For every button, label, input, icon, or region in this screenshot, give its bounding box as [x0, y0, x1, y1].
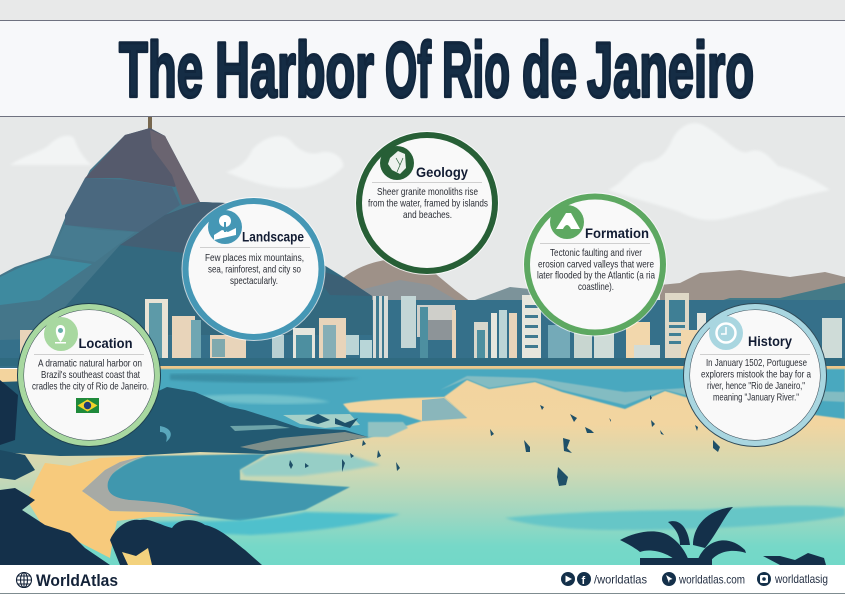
text: Location body: A dramatic natural harbor on	[38, 358, 142, 370]
text: Formation body: coastline).	[578, 282, 614, 293]
skyline buildings	[20, 293, 842, 362]
shoreline	[0, 358, 845, 370]
heading: Geology: Geology	[416, 164, 468, 180]
footer	[0, 565, 845, 594]
bay water and sand	[0, 369, 845, 566]
logo wordmark: WorldAtlas	[36, 571, 118, 590]
text: Geology body	[368, 187, 488, 221]
text: History body: meaning "January River."	[713, 392, 799, 404]
instagram handle: worldatlasig	[774, 572, 828, 586]
title: Harbor	[215, 26, 374, 114]
icon: youtube	[561, 572, 575, 586]
icon: granite rock	[380, 146, 414, 180]
panel: Geology	[355, 131, 499, 275]
text: History body: In January 1502, Portuguese	[706, 358, 807, 369]
text: Landscape body: spectacularly.	[230, 276, 278, 287]
top band	[0, 0, 845, 21]
facebook handle: /worldatlas	[594, 572, 647, 586]
title: Rio	[442, 26, 510, 114]
text: Landscape body	[205, 253, 304, 287]
text: Formation body: Tectonic faulting and river	[550, 248, 642, 259]
foreground palm right	[620, 507, 826, 565]
panel: Formation	[523, 192, 667, 336]
sky	[0, 117, 845, 367]
text: Geology body: from the water, framed by islands	[368, 198, 488, 210]
text: History body	[701, 358, 811, 404]
icon: landscape tree	[208, 210, 242, 244]
text: Landscape body: sea, rainforest, and city so	[208, 264, 301, 276]
heading: Formation: Formation	[585, 225, 649, 241]
text: Location body: cradles the city of Rio de Janeiro.	[32, 382, 149, 392]
text: Location body	[32, 358, 149, 392]
headland	[0, 380, 368, 456]
icon: history clock	[709, 316, 743, 350]
text: Location body: Brazil's southeast coast that	[41, 370, 140, 381]
icon: facebook: f	[582, 575, 586, 587]
icon: instagram	[757, 572, 771, 586]
heading: Landscape: Landscape	[242, 228, 304, 244]
text: Landscape body: Few places mix mountains,	[205, 253, 304, 264]
icon: Brazil flag	[76, 398, 99, 413]
text: Geology body: and beaches.	[403, 210, 452, 221]
heading: Location: Location	[78, 335, 132, 351]
heading: History: History	[748, 333, 792, 349]
text: History body: explorers mistook the bay for a	[701, 370, 811, 380]
text: Formation body	[537, 248, 655, 293]
title: The	[119, 26, 203, 114]
foreground trees left	[0, 450, 262, 565]
title: Of	[385, 26, 432, 114]
title banner	[0, 20, 845, 117]
text: Formation body: later flooded by the Atlantic (a ria	[537, 270, 655, 282]
icon: globe	[16, 572, 32, 588]
icon: facebook	[577, 572, 591, 587]
panel: History	[683, 303, 827, 447]
left beach	[27, 455, 200, 558]
panel: Landscape	[182, 197, 326, 341]
icon: location pin	[44, 317, 78, 351]
icon: cursor	[662, 572, 676, 586]
city band	[0, 300, 845, 368]
website: worldatlas.com	[678, 572, 745, 586]
distant hills	[343, 259, 845, 360]
icon: mountain formation	[550, 205, 584, 239]
panel: Location	[17, 303, 161, 447]
text: Geology body: Sheer granite monoliths rise	[377, 187, 478, 198]
clouds	[10, 123, 830, 220]
title: de	[522, 26, 577, 114]
text: Formation body: erosion carved valleys that were	[538, 260, 654, 270]
Sugarloaf mountain	[0, 117, 372, 340]
text: History body: river, hence "Rio de Janeiro,"	[707, 381, 805, 392]
islands in bay	[289, 395, 720, 486]
